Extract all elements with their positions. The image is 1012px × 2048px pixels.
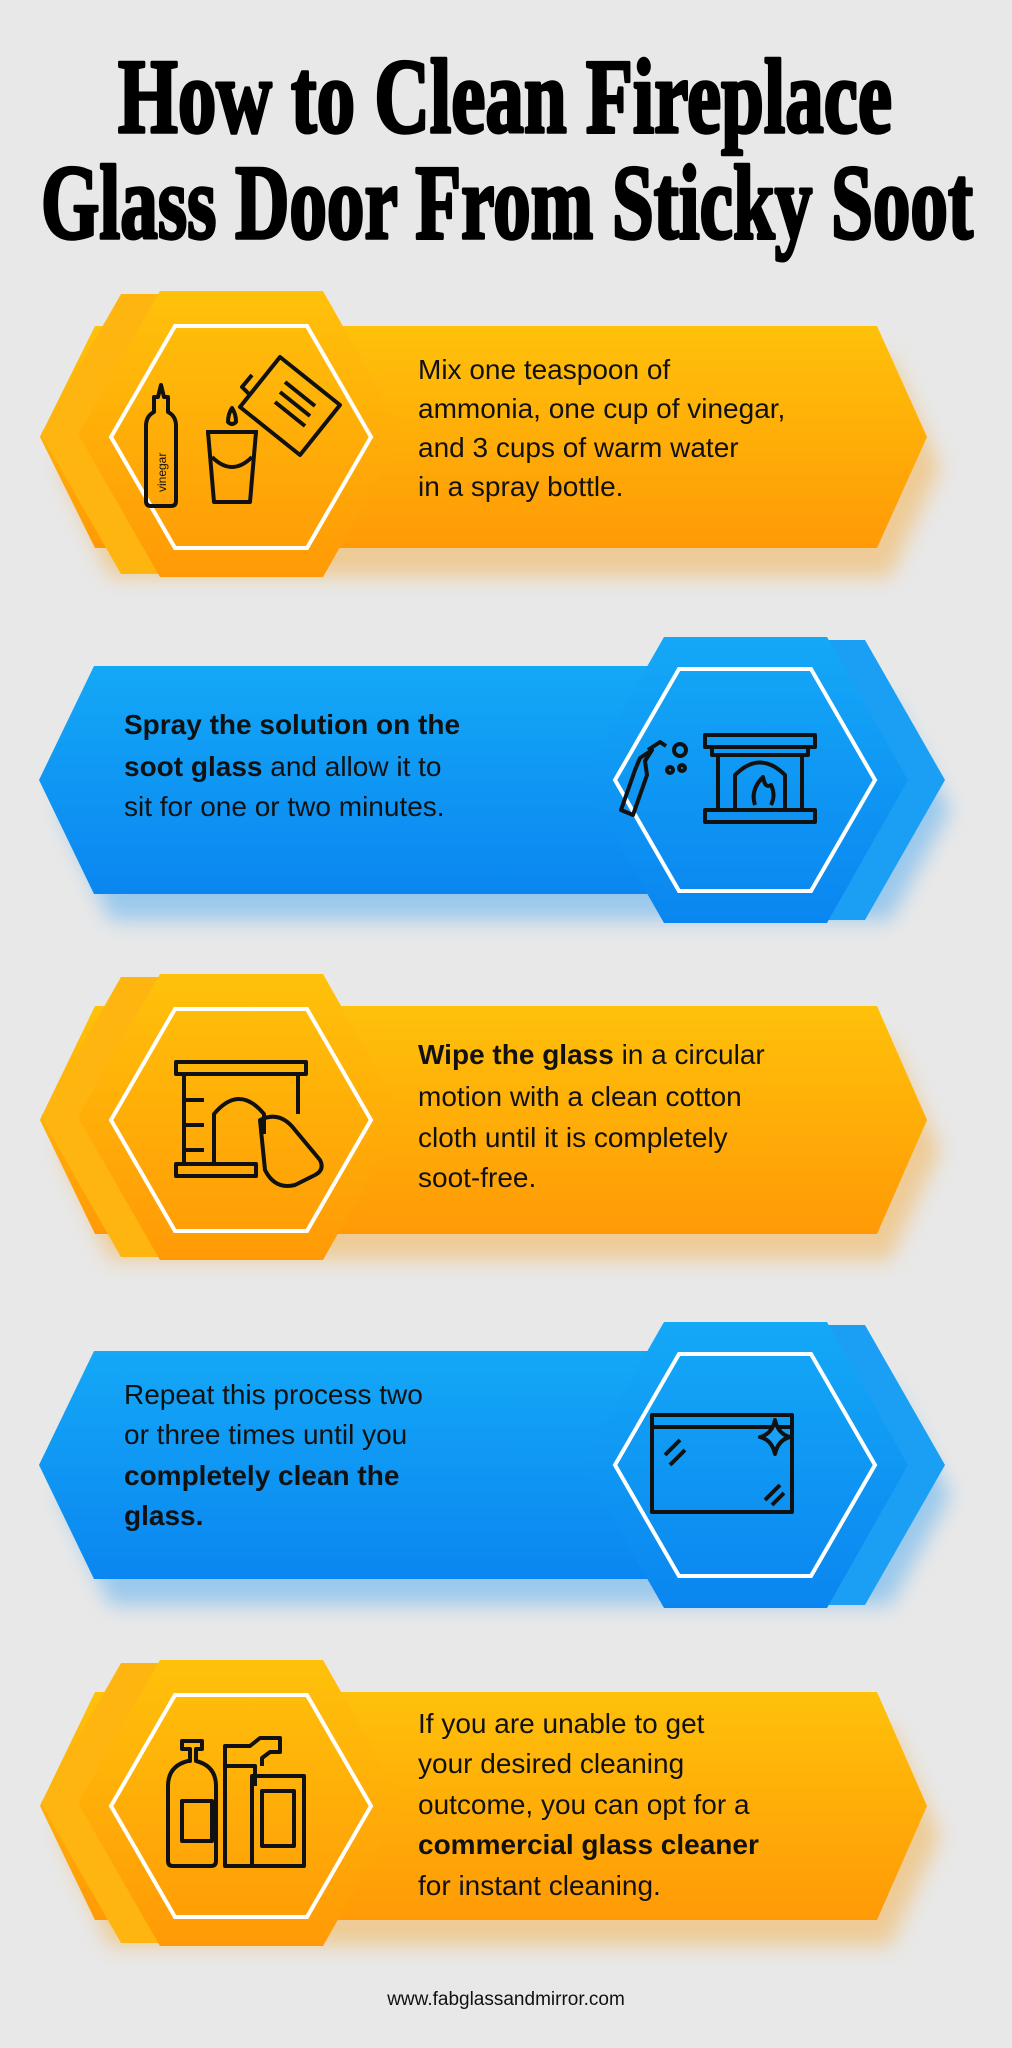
footer url: www.fabglassandmirror.com <box>386 1989 625 2010</box>
icon: clean glass <box>652 1415 792 1512</box>
text: step 5: outcome, you can opt for a <box>418 1789 750 1820</box>
panel: step 5 <box>40 1660 940 1946</box>
panel: step 1 <box>40 291 940 577</box>
text: step 5: commercial glass cleaner <box>418 1829 759 1860</box>
icon: vinegar and bucket <box>146 357 340 506</box>
text: step 3: soot-free. <box>418 1162 536 1193</box>
icon: wiping fireplace <box>176 1062 322 1186</box>
panel: step 3 <box>40 974 940 1260</box>
text: step 3: cloth until it is completely <box>418 1122 728 1153</box>
text: step 2: Spray the solution on the <box>124 709 460 740</box>
text: step 2: soot glass and allow it to <box>124 751 441 782</box>
text: step 1: ammonia, one cup of vinegar, <box>418 393 785 424</box>
panel: step 2 <box>39 637 950 923</box>
text: step 2 <box>124 709 460 822</box>
text: step 4: Repeat this process two <box>124 1379 423 1410</box>
text: step 1: Mix one teaspoon of <box>418 354 670 385</box>
title <box>41 38 973 261</box>
icon: spray and fireplace <box>621 735 815 822</box>
text: step 1: and 3 cups of warm water <box>418 432 739 463</box>
text: step 2: sit for one or two minutes. <box>124 791 445 822</box>
text: step 4: or three times until you <box>124 1419 407 1450</box>
text: step 3: motion with a clean cotton <box>418 1081 742 1112</box>
icon: commercial cleaners <box>168 1738 304 1866</box>
text: step 3 <box>418 1039 765 1193</box>
text: step 1 <box>418 354 785 502</box>
text: step 4: glass. <box>124 1500 203 1531</box>
text: step 4: completely clean the <box>124 1460 399 1491</box>
text: step 5 <box>418 1708 759 1901</box>
text: step 4 <box>124 1379 423 1531</box>
text: step 5: for instant cleaning. <box>418 1870 661 1901</box>
icon: vinegar and bucket: vinegar <box>155 453 169 492</box>
text: step 5: your desired cleaning <box>418 1748 684 1779</box>
panel: step 4 <box>39 1322 950 1608</box>
text: step 1: in a spray bottle. <box>418 471 623 502</box>
text: step 3: Wipe the glass in a circular <box>418 1039 765 1070</box>
text: step 5: If you are unable to get <box>418 1708 705 1739</box>
